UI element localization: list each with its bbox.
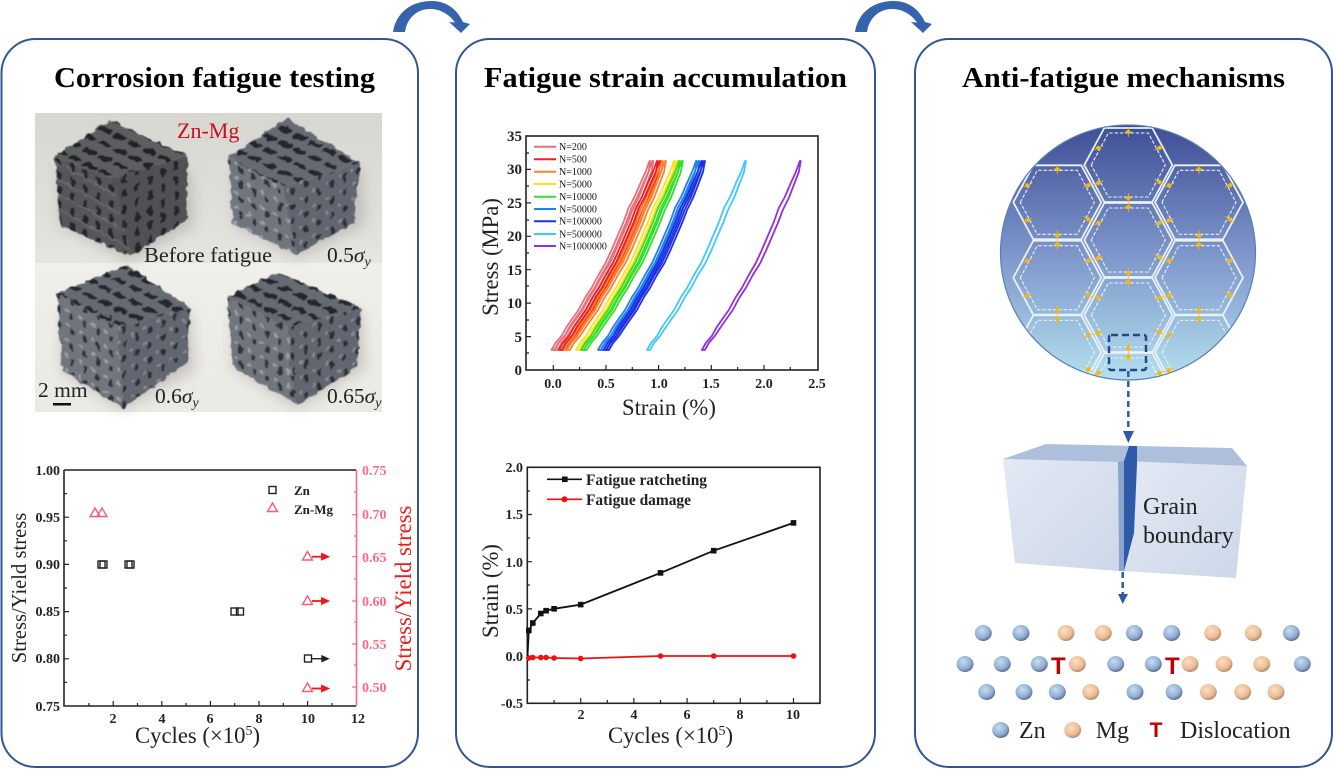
y axis labels: 0.0 [506,650,523,665]
legend: Zn, Mg, dislocation: Mg [1096,718,1129,744]
panel: corrosion fatigue testing [2,39,418,767]
left axis title: Stress/Yield stress [9,513,31,663]
x axis labels: 0.5 [597,377,615,392]
legend: N=50000 [559,204,597,215]
x axis labels: 2.0 [755,377,773,392]
dislocation marks [1051,653,1180,680]
heading: corrosion fatigue testing: Corrosion fatigue testing [54,63,375,94]
arrow: from strain accumulation to mechanisms [855,1,932,33]
x axis labels [544,377,826,392]
x axis title: Cycles (×10 [135,723,245,748]
chart: stress ratio versus cycles [9,464,416,748]
dislocation marks: T [1051,653,1066,680]
legend: N=1000000 [559,241,607,252]
arrow: from corrosion testing to strain accumulation [393,1,470,33]
x axis labels [578,708,800,723]
x axis title: Cycles (×10 [608,723,718,748]
data: Zn squares [98,561,328,662]
x axis labels: 10 [301,712,315,727]
x axis labels: 8 [736,708,744,723]
legend: N=10000 [559,192,597,203]
legend: N=100000 [559,217,602,228]
legend: Zn, Mg, dislocation [992,718,1291,744]
right axis labels: 0.50 [362,681,386,696]
photo label: 0.5 sigma y: 0.5σ [327,243,364,267]
chart: strain versus cycles [478,461,820,748]
legend: N=1000 [559,167,592,178]
cube: 0.65 sigma y [227,272,362,405]
y axis title: Stress (MPa) [478,198,503,316]
heading: anti-fatigue mechanisms: Anti-fatigue mechanisms [962,63,1285,94]
y axis labels: 30 [507,162,522,178]
y axis labels [507,129,522,379]
left axis labels: 1.00 [36,464,60,479]
x axis labels: 6 [684,708,690,723]
run-out arrows [312,554,328,691]
y axis labels: 0 [514,363,522,379]
legend: N=5000 [559,179,592,190]
x axis title: ) [725,723,733,748]
legend: Fatigue ratcheting [586,472,707,489]
panel: fatigue strain accumulation [456,39,875,767]
scale bar: 2 mm: 2 mm [38,378,88,402]
y axis labels: -0.5 [501,697,523,712]
x axis labels: 10 [786,708,800,723]
x axis labels: 8 [256,712,262,727]
arrow: block to atoms [1118,572,1128,604]
y axis labels: 1.0 [506,556,523,571]
right axis labels: 0.70 [362,508,386,523]
y axis labels: 2.0 [506,461,523,476]
x axis labels: 12 [351,712,365,727]
x axis title: 5 [718,724,725,739]
right axis labels [362,464,386,696]
legend: Zn [294,483,311,498]
y axis labels: 5 [514,330,522,346]
selection box [1109,335,1146,370]
legend: Zn-Mg [294,502,334,517]
x axis labels: 2 [110,712,116,727]
photo: lattice cubes before and after fatigue [35,113,382,412]
legend: N=500000 [559,229,602,240]
y axis labels: 10 [507,296,522,312]
left axis labels: 0.90 [36,558,60,573]
left axis labels: 0.85 [36,605,60,620]
label: grain boundary: Grain [1143,494,1198,520]
y axis labels [501,461,523,712]
x axis title: Strain (%) [622,395,716,420]
photo label: 0.6 sigma y: 0.6σ [155,384,192,408]
left axis labels: 0.75 [36,700,60,715]
data: Zn-Mg triangles [90,508,312,692]
y axis labels: 20 [507,229,522,245]
x axis labels: 1.5 [702,377,720,392]
legend: N=200 [559,142,587,153]
right axis title: Stress/Yield stress [391,505,416,671]
left axis labels [36,464,60,715]
hysteresis curves [552,161,801,350]
label: grain boundary [1143,494,1234,549]
x axis title: 5 [245,724,252,739]
y axis title: Strain (%) [478,544,503,638]
x axis labels: 2 [578,708,584,723]
right axis labels: 0.55 [362,638,386,653]
x axis labels [110,712,365,727]
right axis labels: 0.65 [362,551,386,566]
legend [268,483,334,517]
y axis labels: 0.5 [506,603,523,618]
diagram: polycrystal grain disc [1000,124,1256,381]
cube: 0.6 sigma y [57,265,190,408]
diagram: atom rows with dislocations [956,625,1311,700]
x axis title: ) [252,723,260,748]
x axis labels: 0.0 [544,377,562,392]
legend: Zn, Mg, dislocation: T [1150,719,1163,742]
photo label: Zn-Mg: Zn-Mg [177,118,239,143]
y axis labels: 25 [507,196,522,212]
x axis labels: 6 [206,712,214,727]
arrow: disc to grain boundary block [1123,371,1134,443]
label: grain boundary: boundary [1143,523,1234,549]
left axis labels: 0.95 [36,511,60,526]
x axis labels: 1.0 [650,377,668,392]
photo label: 0.65 sigma y: 0.65σ [327,384,375,408]
heading: fatigue strain accumulation: Fatigue strain accumulation [484,63,847,94]
y axis labels: 1.5 [506,508,523,523]
legend: Zn, Mg, dislocation: Dislocation [1180,718,1291,744]
photo label: 0.65 sigma y: y [373,396,382,411]
x axis labels: 4 [630,708,638,723]
panel: anti-fatigue mechanisms [915,39,1332,767]
y axis labels: 35 [507,129,522,145]
chart: stress strain hysteresis loops [478,129,826,420]
cube: 0.5 sigma y [228,118,360,255]
right axis labels: 0.60 [362,595,386,610]
cube: before fatigue [55,120,187,256]
series: fatigue damage [526,653,796,661]
diagram: grain boundary block [1003,444,1247,578]
dislocation marks: T [1165,653,1180,680]
photo label: 0.6 sigma y: y [190,396,199,411]
left axis labels: 0.80 [36,652,60,667]
legend: N=500 [559,154,587,166]
y axis labels: 15 [507,263,522,279]
photo label: before fatigue: Before fatigue [144,243,272,267]
legend [534,142,607,252]
legend: Fatigue damage [586,492,691,509]
series: fatigue ratcheting [526,520,796,656]
photo label: 0.5 sigma y: y [362,255,371,270]
legend: Zn, Mg, dislocation: Zn [1019,718,1046,744]
right axis labels: 0.75 [362,464,386,479]
x axis labels: 2.5 [808,377,826,392]
x axis labels: 4 [158,712,166,727]
legend [547,472,707,509]
